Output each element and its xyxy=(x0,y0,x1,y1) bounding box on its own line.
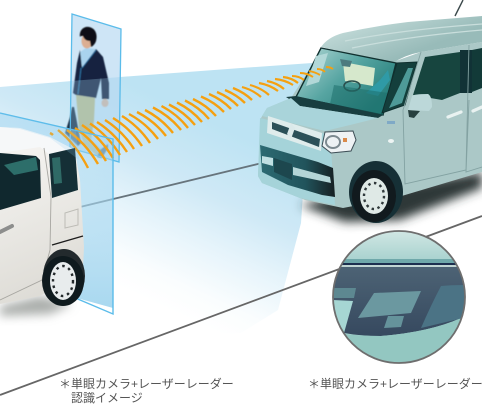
headlight indicator xyxy=(343,138,347,142)
pedestrian head xyxy=(82,34,92,48)
car roof xyxy=(0,127,75,155)
steering wheel xyxy=(344,81,360,91)
left reflection xyxy=(333,288,356,298)
windshield glass xyxy=(330,267,466,336)
rear window glare xyxy=(52,157,62,184)
rear view mirror xyxy=(340,59,352,67)
inset background xyxy=(333,231,465,363)
side mirror shadow xyxy=(408,110,420,118)
wheel arch xyxy=(349,161,403,223)
blue-green car xyxy=(258,0,482,223)
rear door window xyxy=(472,48,482,92)
chrome grille xyxy=(267,116,322,151)
plate badge xyxy=(274,158,292,180)
right reflection xyxy=(421,285,466,328)
door handles xyxy=(448,107,482,117)
fuel lid xyxy=(65,209,78,228)
fender dot xyxy=(388,139,394,143)
camera unit xyxy=(358,291,421,318)
windshield xyxy=(296,48,396,115)
door window xyxy=(0,153,41,210)
body crease xyxy=(52,236,83,245)
pedestrian shoe xyxy=(97,144,108,158)
inset ring xyxy=(333,231,465,363)
front fascia tint xyxy=(258,118,335,205)
driver xyxy=(366,70,390,96)
side mirror xyxy=(408,94,432,111)
side marker xyxy=(387,121,395,124)
car shadow: white car xyxy=(0,296,72,316)
door outline xyxy=(0,148,51,300)
pedestrian shirt xyxy=(80,48,96,68)
pedestrian bag xyxy=(65,107,81,146)
front door window xyxy=(413,52,460,100)
lower bumper opening xyxy=(260,145,335,197)
tire xyxy=(42,256,84,306)
pedestrian cardigan xyxy=(73,49,109,99)
pedestrian detection plane xyxy=(70,14,121,162)
vehicle front detection plane xyxy=(0,113,113,308)
car shadow: blue-green car xyxy=(300,172,482,222)
plane outline xyxy=(70,14,121,162)
road line: lower xyxy=(0,216,482,395)
inset artwork xyxy=(330,231,468,366)
camera mount xyxy=(384,316,404,328)
left cabin panel xyxy=(334,300,353,332)
door window reflection xyxy=(4,157,38,175)
headlight xyxy=(322,131,356,153)
molding line xyxy=(342,263,456,265)
floor tint over pedestrian xyxy=(70,77,121,162)
fog lamp bar: right xyxy=(293,167,331,183)
windshield sky panel xyxy=(343,62,375,86)
roof edge strip xyxy=(344,259,454,263)
laser scan stripes xyxy=(50,67,333,168)
lower windshield tint xyxy=(330,85,388,115)
roof panel xyxy=(351,232,448,254)
pedestrian hair xyxy=(80,27,97,47)
door outlines xyxy=(403,45,482,184)
hub xyxy=(360,178,388,214)
plane edge lines xyxy=(0,113,113,314)
car body xyxy=(0,127,84,304)
door pillar xyxy=(460,50,472,93)
cardigan trim xyxy=(78,50,96,94)
emblem xyxy=(287,123,295,139)
white car xyxy=(0,127,85,306)
inset: windshield camera close-up xyxy=(330,231,468,366)
pedestrian xyxy=(65,27,109,158)
hub holes xyxy=(364,183,384,209)
pedestrian hand xyxy=(102,99,108,107)
door handle xyxy=(0,226,12,232)
hood xyxy=(262,98,378,131)
headlight lens xyxy=(326,136,340,148)
car roof xyxy=(321,16,482,63)
detection beam on road surface xyxy=(0,63,312,340)
body panel below glass xyxy=(346,319,460,362)
tire xyxy=(352,170,396,222)
caption: recognition image xyxy=(59,376,234,405)
wheel arch xyxy=(43,249,85,303)
molding highlight xyxy=(342,265,456,267)
windshield left glare xyxy=(306,53,328,86)
road line: upper xyxy=(80,163,262,207)
plane tint over white car roof xyxy=(0,113,79,160)
antenna xyxy=(455,0,463,16)
car body xyxy=(258,42,482,208)
fog lamp bar: left xyxy=(262,156,273,166)
hub holes xyxy=(53,266,73,296)
grille slot xyxy=(272,122,320,147)
caption: recognition image: 認識イメージ xyxy=(71,391,143,405)
hub xyxy=(50,262,76,300)
pedestrian trousers xyxy=(76,95,104,158)
quarter window glare xyxy=(389,68,413,108)
side quarter window xyxy=(382,62,417,113)
roof ridges xyxy=(345,24,482,48)
rear side window xyxy=(49,148,78,198)
caption: sensor close-up: ＊単眼カメラ+レーザーレーダー xyxy=(308,376,482,391)
caption: recognition image: ＊単眼カメラ+レーザーレーダー xyxy=(59,376,234,391)
hood shadow xyxy=(286,96,383,118)
